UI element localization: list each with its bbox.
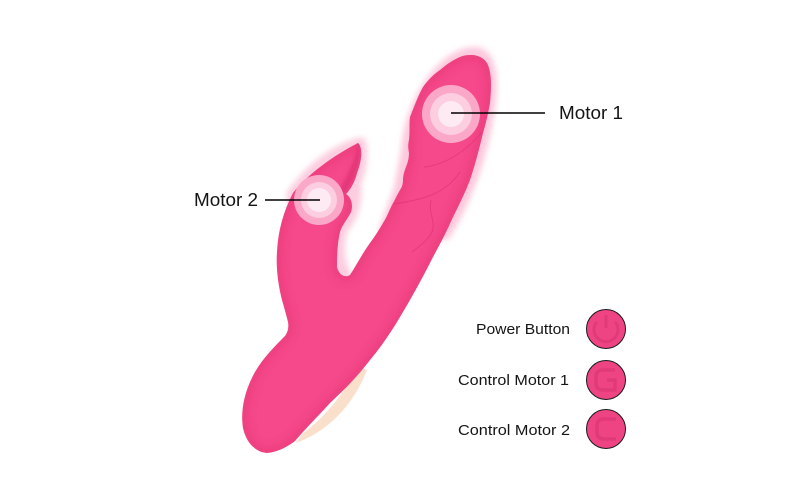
cream base accent xyxy=(296,366,367,443)
vibration halo: shaft xyxy=(378,47,497,240)
legend: control motor 1 xyxy=(458,360,626,400)
leader line: motor 2 xyxy=(265,199,320,201)
motor 1 vibration marker xyxy=(422,85,480,143)
legend: control motor 1: Control Motor 1 xyxy=(458,372,569,389)
icon: power button xyxy=(586,310,626,348)
legend: control motor 2 xyxy=(458,410,626,448)
icon: C button xyxy=(586,410,626,448)
label: Motor 1: Motor 1 xyxy=(559,103,623,123)
legend: power button xyxy=(476,310,626,348)
edge shading xyxy=(242,55,491,453)
shading on rabbit tip xyxy=(335,146,359,196)
legend: power button: Power Button xyxy=(476,321,570,338)
leader line: motor 1 xyxy=(451,112,545,114)
legend: control motor 2: Control Motor 2 xyxy=(458,422,570,439)
vibration halo: rabbit ear xyxy=(286,137,367,282)
label: Motor 2: Motor 2 xyxy=(194,190,258,210)
icon: G button xyxy=(586,360,626,400)
body silhouette xyxy=(242,55,491,453)
shaft vein details xyxy=(394,132,482,252)
product illustration xyxy=(242,47,497,453)
motor 2 vibration marker xyxy=(294,175,344,225)
